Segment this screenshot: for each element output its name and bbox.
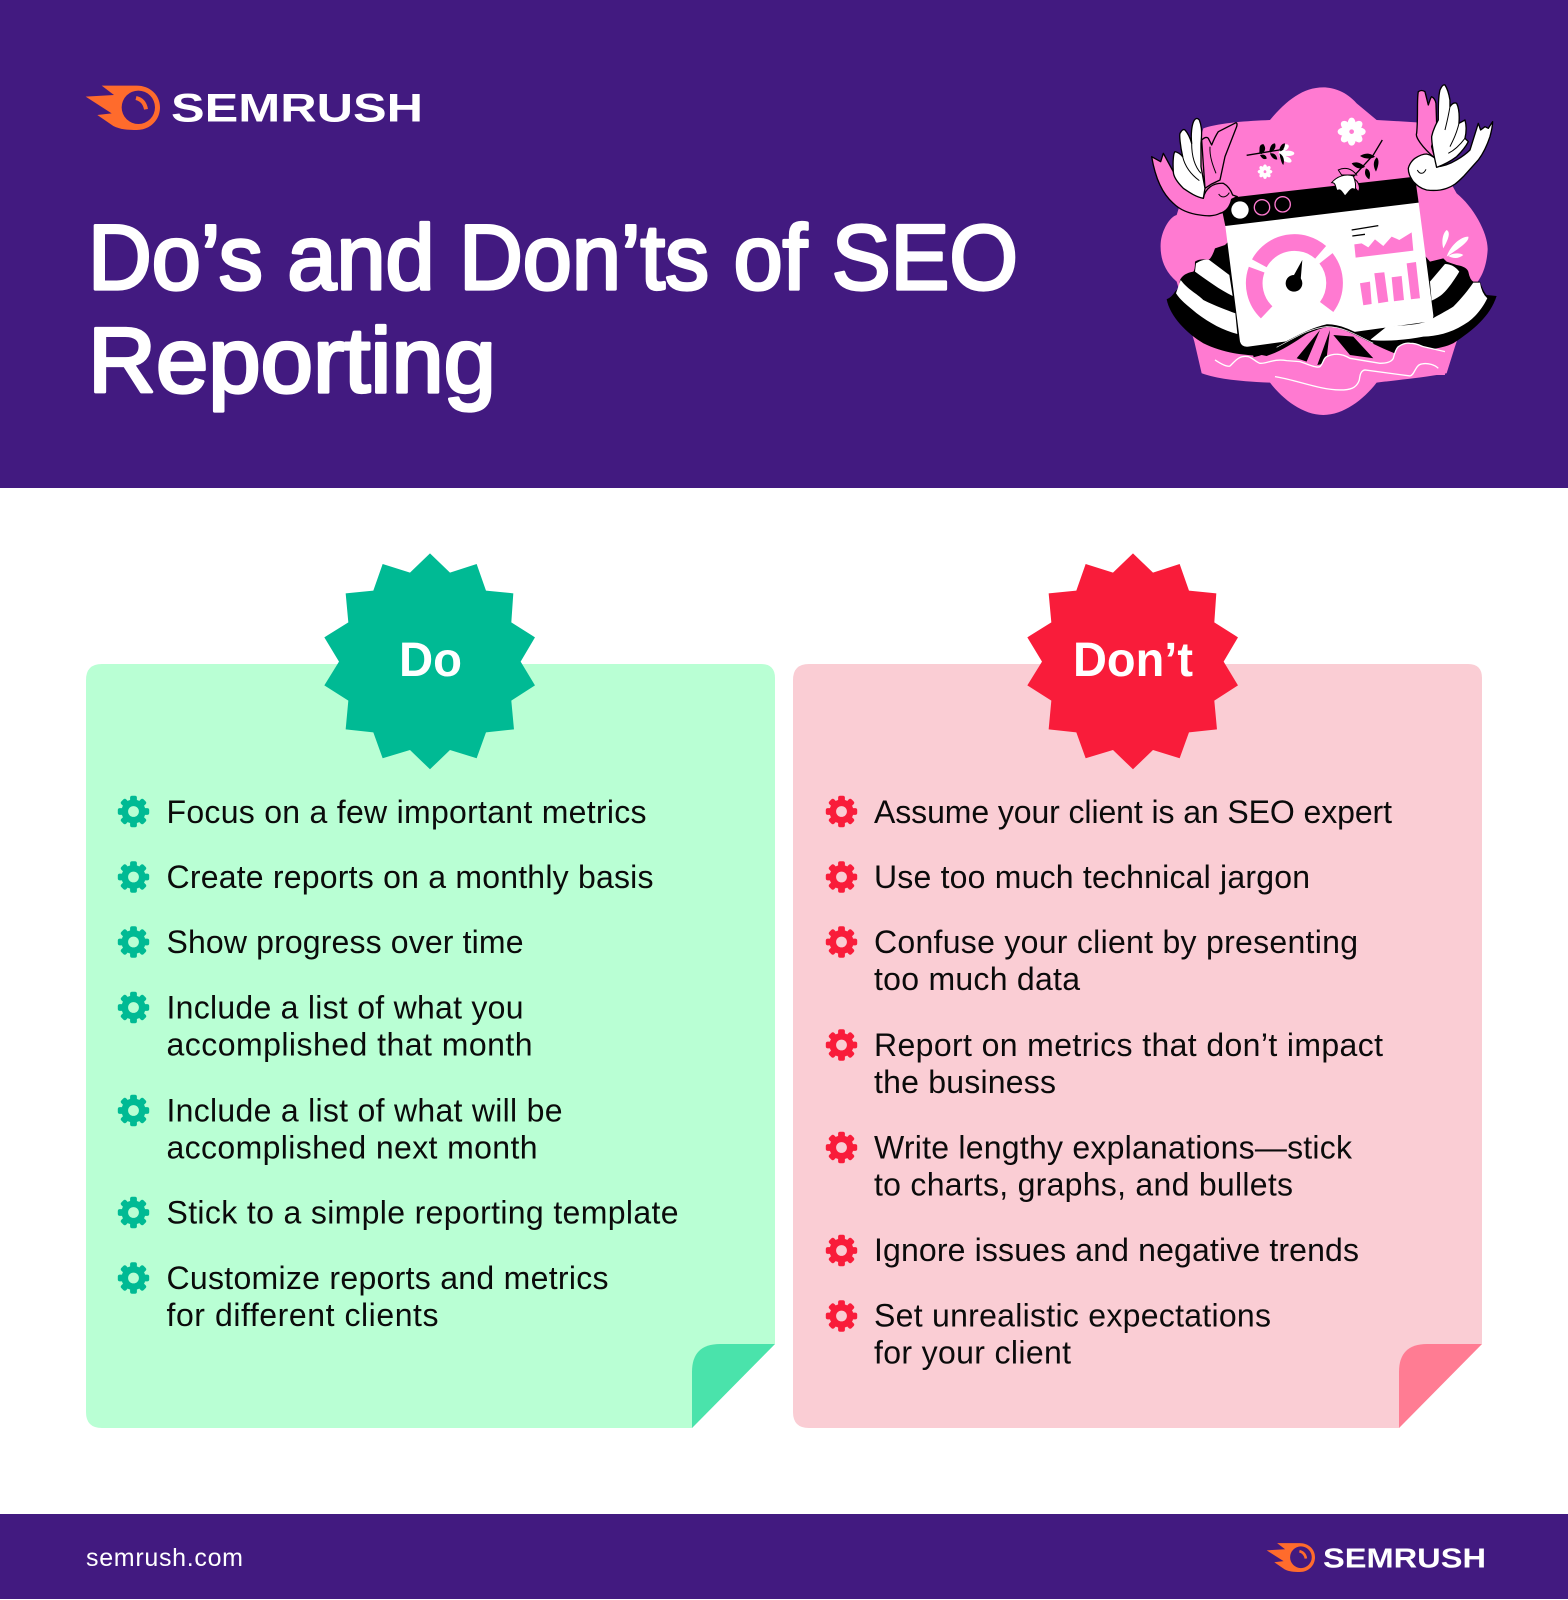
panel background — [86, 664, 775, 1428]
item: too much data: Confuse your client by presenting — [874, 924, 1358, 960]
badge: don't — [1027, 553, 1238, 769]
open book right pages — [1327, 250, 1497, 353]
item: expert: Assume your client is an SEO expert — [874, 794, 1392, 830]
footer band — [0, 1514, 1568, 1599]
panel: don't — [793, 553, 1482, 1428]
item: accomplished — [118, 990, 533, 1063]
book centre pages — [1253, 325, 1397, 365]
pink blob background — [1161, 87, 1488, 415]
footer logo: SEMRUSH — [1323, 1543, 1486, 1574]
footer logo — [1267, 1543, 1486, 1574]
item: impact: the business — [874, 1064, 1056, 1100]
item: too much data — [826, 924, 1358, 997]
badge: do — [324, 553, 535, 769]
item: lengthy — [826, 1130, 1353, 1203]
item: expectations — [826, 1298, 1271, 1371]
footer url: semrush.com — [86, 1544, 243, 1572]
item: too much data: too much data — [874, 961, 1080, 997]
page fold — [1399, 1344, 1482, 1428]
item: expectations: for your client — [874, 1335, 1071, 1371]
illustration: dashboard with birds — [1152, 85, 1497, 415]
right bird — [1408, 85, 1493, 190]
item: customize — [118, 1260, 609, 1333]
badge: do: Do — [399, 634, 462, 687]
title: Do’s and Don’ts of SEO — [88, 207, 1018, 309]
item: next month: Include a list of what will be — [166, 1093, 562, 1129]
panel: do — [86, 553, 775, 1428]
item: lengthy: to charts, graphs, and bullets — [874, 1167, 1293, 1203]
icon: fireball — [86, 86, 160, 130]
title — [88, 207, 1018, 412]
logo wordmark: SEMRUSH — [171, 87, 423, 131]
mini charts — [1352, 226, 1420, 305]
header band — [0, 0, 1568, 488]
item: focus: Focus on a few important metrics — [166, 794, 646, 830]
item: customize: Customize reports and metrics — [166, 1260, 608, 1296]
left bird — [1152, 118, 1237, 216]
item: progress: Show progress over time — [166, 924, 524, 960]
item: accomplished: Include a list of what you — [166, 990, 524, 1026]
gauge — [1254, 243, 1335, 312]
water — [1215, 343, 1445, 390]
item: accomplished: accomplished that month — [166, 1027, 532, 1063]
item: issues: Ignore issues and negative trends — [874, 1232, 1359, 1268]
item: next month — [118, 1093, 563, 1166]
item: lengthy: Write lengthy explanations—stick — [874, 1130, 1353, 1166]
page fold — [692, 1344, 775, 1428]
title: Reporting — [88, 310, 496, 412]
browser window — [1222, 177, 1433, 347]
item: monthly: Create reports on a monthly basis — [166, 859, 654, 895]
item: expectations: Set unrealistic expectations — [874, 1298, 1271, 1334]
do list — [118, 794, 679, 1333]
item: customize: for different clients — [166, 1297, 438, 1333]
open book left pages — [1167, 240, 1327, 356]
item: jargon: Use too much technical jargon — [874, 859, 1310, 895]
flowers and sprigs — [1247, 118, 1468, 258]
logo: Semrush — [86, 86, 423, 131]
panel background — [793, 664, 1482, 1428]
item: impact: Report on metrics that don’t impact — [874, 1027, 1383, 1063]
item: impact — [826, 1027, 1383, 1100]
don't list — [826, 794, 1392, 1371]
badge: don't: Don’t — [1073, 634, 1193, 687]
item: next month: accomplished next month — [166, 1130, 538, 1166]
item: template: Stick to a simple reporting template — [166, 1195, 678, 1231]
